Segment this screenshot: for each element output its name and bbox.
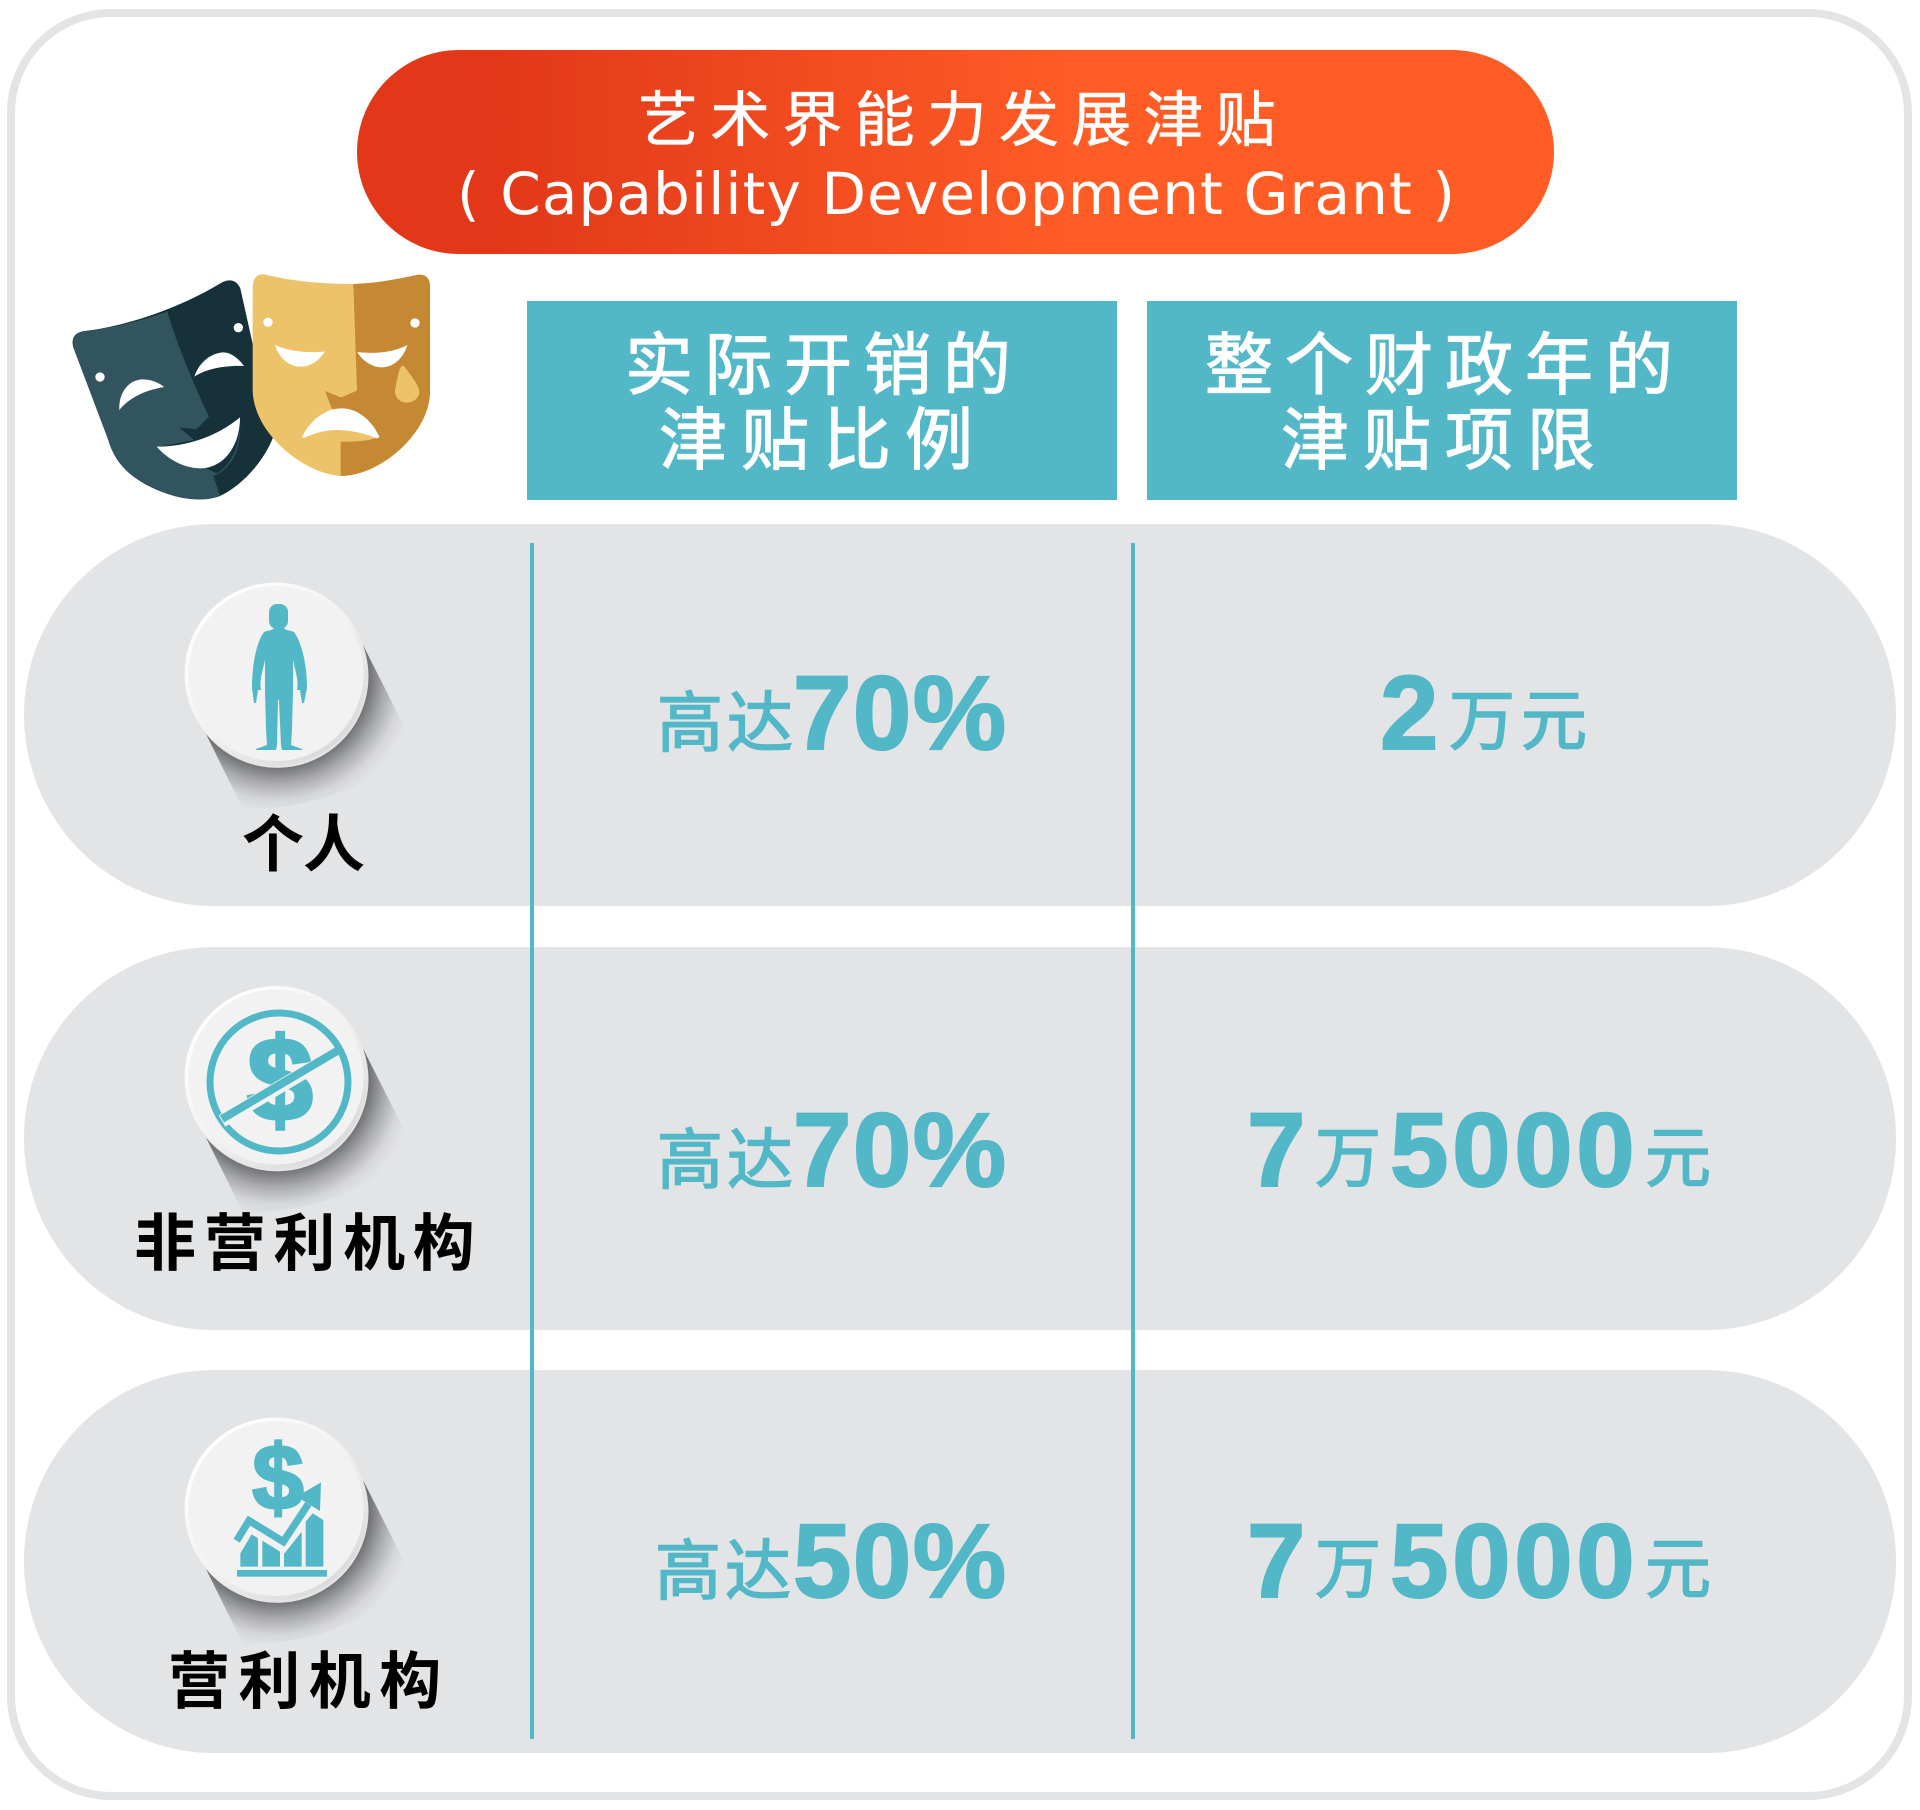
value: 75,000: 元 [1645, 1532, 1711, 1606]
label: individual: 个人 [242, 811, 364, 880]
value: 75,000: 7 [1247, 1092, 1305, 1209]
row: for-profit [24, 1370, 1896, 1753]
row: individual [24, 524, 1896, 906]
label: for-profit organisation: 营利机构 [168, 1648, 450, 1717]
value: up to 70%: 高达 [657, 686, 797, 760]
label: non-profit organisation: 非营利机构 [134, 1210, 483, 1279]
value: 75,000: 万 [1315, 1532, 1381, 1606]
value: up to 50%: 高达 [655, 1534, 795, 1608]
icon: comedy and tragedy masks [73, 274, 430, 499]
column header: subsidy ratio [527, 301, 1117, 500]
value: 75,000 [1247, 1503, 1711, 1620]
value: up to 50% [655, 1503, 1008, 1620]
column divider 1 [530, 543, 534, 1739]
value: up to 70% [657, 655, 1008, 772]
column header: annual cap [1147, 301, 1737, 500]
value: 75,000: 5000 [1390, 1092, 1638, 1209]
value: 20,000: 万元 [1449, 684, 1593, 758]
value: 20,000: 2 [1380, 655, 1438, 772]
value: 75,000 [1247, 1092, 1711, 1209]
title: Chinese: 艺术界能力发展津贴 [638, 87, 1288, 154]
value: 20,000 [1380, 655, 1593, 772]
icon: no dollar badge: $ [247, 1014, 313, 1146]
icon: profit growth badge [184, 1418, 409, 1644]
value: 75,000: 万 [1315, 1121, 1381, 1195]
column header: annual cap: 整个财政年的 [1205, 328, 1685, 404]
icon: profit growth badge: $ [252, 1427, 304, 1529]
icon: person badge [184, 582, 409, 809]
value: up to 70%: 高达 [657, 1123, 797, 1197]
value: 75,000: 7 [1247, 1503, 1305, 1620]
value: up to 70%: 70% [793, 1092, 1008, 1209]
row: non-profit [24, 947, 1896, 1330]
column header: subsidy ratio: 津贴比例 [659, 403, 987, 479]
value: up to 70%: 70% [793, 655, 1008, 772]
title: English: ( Capability Development Grant ) [457, 160, 1455, 228]
value: 75,000: 元 [1645, 1121, 1711, 1195]
value: up to 70% [657, 1092, 1008, 1209]
title banner [357, 50, 1554, 254]
column header: annual cap: 津贴项限 [1281, 403, 1609, 479]
value: up to 50%: 50% [793, 1503, 1008, 1620]
value: 75,000: 5000 [1390, 1503, 1638, 1620]
icon: no dollar badge [184, 986, 409, 1212]
column divider 2 [1131, 543, 1135, 1739]
column header: subsidy ratio: 实际开销的 [625, 328, 1023, 404]
